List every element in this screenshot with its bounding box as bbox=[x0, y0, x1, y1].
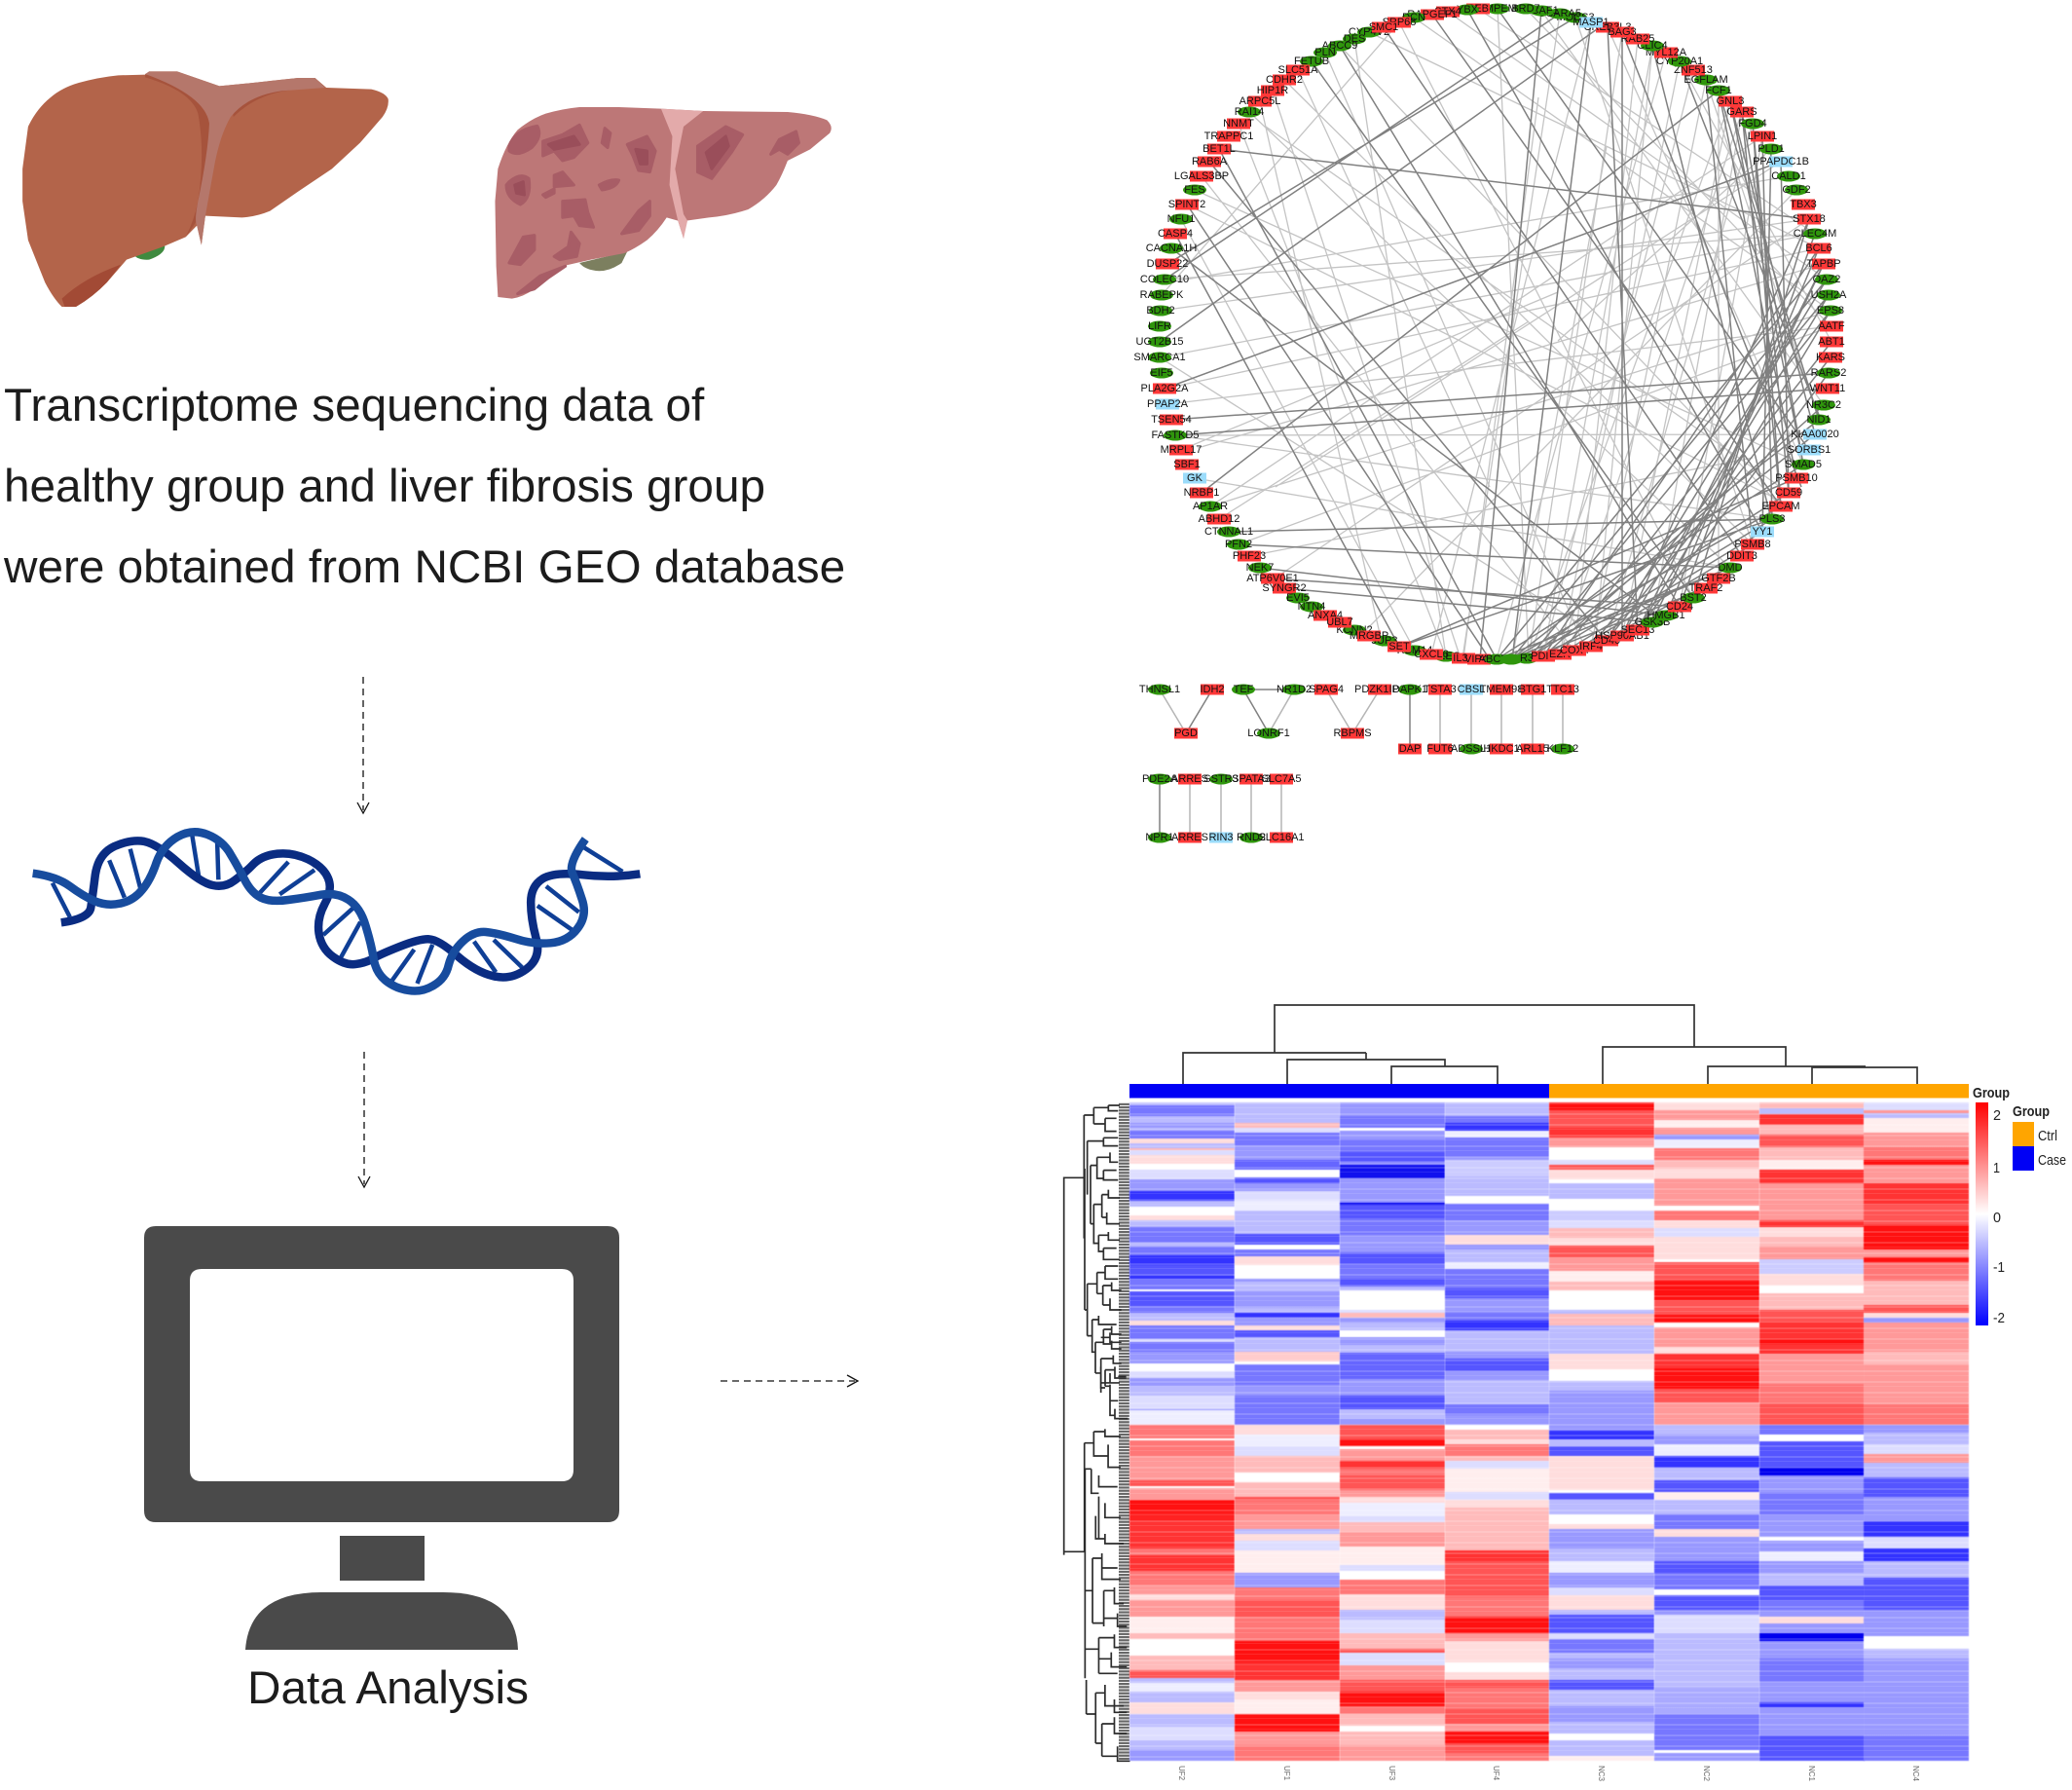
network nodes and gene labels: NTN4 bbox=[1298, 601, 1325, 613]
network nodes and gene labels: RAB25 bbox=[1621, 33, 1654, 45]
network nodes and gene labels: ABT1 bbox=[1818, 336, 1845, 348]
network nodes and gene labels: BST2 bbox=[1680, 592, 1707, 604]
network nodes and gene labels: SET bbox=[1388, 641, 1410, 653]
network nodes and gene labels: DMD bbox=[1718, 562, 1743, 574]
network nodes and gene labels: BRD7 bbox=[1511, 3, 1540, 15]
heatmap: sample labels: UF4 bbox=[1492, 1766, 1500, 1781]
network nodes and gene labels: CREB3L3 bbox=[1584, 21, 1631, 33]
network nodes and gene labels: SPINT2 bbox=[1168, 199, 1205, 210]
heatmap: sample labels bbox=[1177, 1766, 1920, 1782]
network nodes and gene labels bbox=[1133, 3, 1847, 665]
network nodes and gene labels: OAZ2 bbox=[1813, 274, 1840, 285]
network nodes and gene labels: MASP1 bbox=[1572, 17, 1610, 28]
network nodes and gene labels: NEK7 bbox=[1246, 562, 1274, 574]
network nodes and gene labels: FES bbox=[1184, 184, 1205, 196]
heatmap: colour scale legend: 2 bbox=[1993, 1107, 2001, 1124]
network nodes and gene labels: TSEN54 bbox=[1151, 414, 1192, 426]
cluster nodes and gene labels: TEF bbox=[1234, 684, 1254, 695]
network: small disconnected gene clusters bbox=[1139, 684, 1579, 843]
network nodes and gene labels: PPAP2A bbox=[1147, 398, 1189, 410]
network nodes and gene labels: COX4 bbox=[1560, 645, 1589, 656]
network: main circular gene interaction graph bbox=[1133, 3, 1847, 665]
network nodes and gene labels: RAI14 bbox=[1235, 106, 1264, 118]
network nodes and gene labels: ANXA4 bbox=[1308, 610, 1343, 621]
network nodes and gene labels: CD40 bbox=[1593, 635, 1620, 647]
network nodes and gene labels: TMPEM bbox=[1478, 3, 1517, 15]
heatmap column NC3 bbox=[1549, 1102, 1654, 1761]
cluster nodes and gene labels: ARL15 bbox=[1516, 743, 1549, 755]
network nodes and gene labels: NID1 bbox=[1806, 414, 1832, 426]
network nodes and gene labels: SBF1 bbox=[1173, 459, 1201, 470]
network nodes and gene labels: AP1AR bbox=[1193, 501, 1228, 512]
network nodes and gene labels: PLD1 bbox=[1758, 143, 1785, 155]
label: data analysis: Data Analysis bbox=[247, 1662, 529, 1714]
network nodes and gene labels: GNL3 bbox=[1717, 95, 1744, 107]
network nodes and gene labels: CYP4V2 bbox=[1349, 26, 1389, 38]
caption: transcriptome data source: healthy group and liver fibrosis group bbox=[4, 461, 765, 512]
network nodes and gene labels: RABEPK bbox=[1140, 289, 1184, 301]
network nodes and gene labels: PPAPDC1B bbox=[1753, 156, 1809, 168]
cluster nodes and gene labels: DAPK1 bbox=[1392, 684, 1427, 695]
network nodes and gene labels: FCF1 bbox=[1705, 85, 1732, 96]
cluster edges bbox=[1160, 690, 1563, 838]
network nodes and gene labels: EGFLAM bbox=[1684, 74, 1728, 86]
cluster nodes and gene labels: TSTA3 bbox=[1424, 684, 1457, 695]
heatmap: sample labels: NC1 bbox=[1807, 1766, 1816, 1782]
network nodes and gene labels: PDIA bbox=[1531, 651, 1556, 662]
cluster nodes and gene labels: CBSL bbox=[1458, 684, 1485, 695]
network nodes and gene labels: AATF bbox=[1818, 320, 1845, 332]
network nodes and gene labels: GARS bbox=[1726, 106, 1758, 118]
network nodes and gene labels: GSK3B bbox=[1635, 616, 1670, 628]
network nodes and gene labels: PLS3 bbox=[1759, 513, 1785, 525]
network nodes and gene labels: TRAF2 bbox=[1689, 582, 1722, 594]
cluster nodes and gene labels: PDE2A bbox=[1142, 773, 1178, 785]
heatmap: sample labels: UF1 bbox=[1282, 1766, 1291, 1781]
cluster nodes and gene labels: LONRF1 bbox=[1247, 727, 1290, 739]
heatmap: sample labels: UF2 bbox=[1177, 1766, 1186, 1781]
heatmap: group annotation bar bbox=[1129, 1084, 1969, 1099]
cluster nodes and gene labels: PGD bbox=[1174, 727, 1198, 739]
network nodes and gene labels: BCL6 bbox=[1805, 242, 1832, 254]
heatmap column UF1 bbox=[1235, 1102, 1340, 1761]
network nodes and gene labels: YY1 bbox=[1753, 526, 1772, 538]
cluster nodes and gene labels: IDH2 bbox=[1200, 684, 1225, 695]
cluster nodes and gene labels: KLF12 bbox=[1547, 743, 1578, 755]
cluster nodes and gene labels: RIN3 bbox=[1208, 832, 1234, 843]
network nodes and gene labels: BET1L bbox=[1202, 143, 1236, 155]
network nodes and gene labels: CTNNAL1 bbox=[1204, 526, 1253, 538]
network nodes and gene labels: GTF2B bbox=[1701, 573, 1736, 584]
network nodes and gene labels: DUSP22 bbox=[1147, 258, 1188, 270]
network nodes and gene labels: MOCS3 bbox=[1556, 12, 1595, 23]
network nodes and gene labels: BAG3 bbox=[1608, 26, 1637, 38]
cluster nodes and gene labels bbox=[1139, 684, 1579, 843]
network nodes and gene labels: SCARA5 bbox=[1538, 8, 1581, 19]
cluster nodes and gene labels: SPAG4 bbox=[1309, 684, 1344, 695]
network nodes and gene labels: PSMB10 bbox=[1775, 472, 1818, 484]
heatmap column UF2 bbox=[1129, 1102, 1235, 1761]
network nodes and gene labels: LGALS3BP bbox=[1174, 170, 1229, 182]
cluster nodes and gene labels: TTC13 bbox=[1546, 684, 1579, 695]
network nodes and gene labels: NRBP1 bbox=[1184, 487, 1219, 499]
network nodes and gene labels: BDH2 bbox=[1146, 305, 1175, 317]
heatmap: group legend: Case bbox=[2038, 1152, 2066, 1169]
network nodes and gene labels: ABCD4 bbox=[1479, 653, 1514, 665]
network nodes and gene labels: PHF23 bbox=[1233, 550, 1266, 562]
network nodes and gene labels: PEB bbox=[1467, 3, 1489, 15]
network nodes and gene labels: KCNN2 bbox=[1336, 624, 1373, 636]
cluster nodes and gene labels: RBPMS bbox=[1333, 727, 1372, 739]
cluster nodes and gene labels: NR1D2 bbox=[1276, 684, 1312, 695]
network nodes and gene labels: CYP20A1 bbox=[1656, 56, 1703, 67]
network nodes and gene labels: TBX3 bbox=[1790, 199, 1817, 210]
heatmap: sample labels: NC2 bbox=[1702, 1766, 1711, 1782]
network nodes and gene labels: IRF4 bbox=[1579, 641, 1603, 653]
network edges: weak interactions bbox=[1160, 9, 1832, 659]
network nodes and gene labels: RARS2 bbox=[1811, 367, 1846, 379]
network nodes and gene labels: CLEC4M bbox=[1794, 228, 1836, 240]
heatmap column NC1 bbox=[1759, 1102, 1865, 1761]
network nodes and gene labels: DCN bbox=[1402, 12, 1425, 23]
heatmap: group legend: Ctrl bbox=[2038, 1128, 2057, 1144]
arrow: liver to DNA bbox=[357, 677, 369, 813]
network nodes and gene labels: ATP6V0E1 bbox=[1246, 573, 1299, 584]
network nodes and gene labels: SMAD5 bbox=[1785, 459, 1822, 470]
network nodes and gene labels: CD24 bbox=[1666, 601, 1693, 613]
cluster nodes and gene labels: RND2 bbox=[1237, 832, 1266, 843]
cluster nodes and gene labels: FUT6 bbox=[1426, 743, 1454, 755]
network nodes and gene labels: CALD1 bbox=[1771, 170, 1806, 182]
network nodes and gene labels: EPCAM bbox=[1761, 501, 1800, 512]
cluster nodes and gene labels: HKDC1 bbox=[1483, 743, 1520, 755]
network nodes and gene labels: SRP68 bbox=[1383, 17, 1416, 28]
cluster nodes and gene labels: SSTR3 bbox=[1203, 773, 1239, 785]
network nodes and gene labels: LPIN1 bbox=[1748, 131, 1777, 142]
caption: transcriptome data source: were obtained from NCBI GEO database bbox=[4, 541, 845, 593]
network nodes and gene labels: NR3C2 bbox=[1806, 399, 1841, 411]
cluster nodes and gene labels: DAP bbox=[1399, 743, 1421, 755]
network nodes and gene labels: CASP4 bbox=[1158, 228, 1193, 240]
heatmap column UF4 bbox=[1445, 1102, 1549, 1761]
network nodes and gene labels: CLIC4 bbox=[1637, 40, 1668, 52]
network nodes and gene labels: ZNF513 bbox=[1674, 64, 1713, 76]
network nodes and gene labels: LIFR bbox=[1148, 320, 1171, 332]
cluster nodes and gene labels: ARRES bbox=[1171, 773, 1208, 785]
network nodes and gene labels: STX4 bbox=[1434, 6, 1462, 18]
heatmap: sample dendrogram bbox=[1183, 1005, 1917, 1084]
network nodes and gene labels: PSMB8 bbox=[1734, 539, 1771, 550]
network nodes and gene labels: COLEC10 bbox=[1140, 274, 1189, 285]
network nodes and gene labels: SMC1 bbox=[1369, 21, 1398, 33]
arrow: computer to results bbox=[721, 1375, 858, 1387]
network nodes and gene labels: SYNGR2 bbox=[1262, 582, 1307, 594]
heatmap: group legend bbox=[2013, 1103, 2066, 1171]
network nodes and gene labels: STX18 bbox=[1793, 213, 1826, 225]
heatmap column NC4 bbox=[1864, 1102, 1969, 1761]
network nodes and gene labels: EPS8 bbox=[1817, 305, 1844, 317]
heatmap column UF3 bbox=[1340, 1102, 1445, 1761]
heatmap: gene dendrogram bbox=[1064, 1102, 1130, 1761]
network nodes and gene labels: SCAF1 bbox=[1524, 5, 1559, 17]
network nodes and gene labels: CXCL6 bbox=[1414, 649, 1449, 660]
heatmap: colour scale legend bbox=[1973, 1085, 2010, 1326]
network nodes and gene labels: ABHD12 bbox=[1199, 513, 1240, 525]
network nodes and gene labels: VIP48 bbox=[1464, 653, 1494, 665]
network nodes and gene labels: MYL12A bbox=[1646, 47, 1687, 58]
heatmap: sample labels: NC3 bbox=[1597, 1766, 1606, 1782]
network nodes and gene labels: CD59 bbox=[1775, 487, 1802, 499]
heatmap: colour scale legend: 0 bbox=[1993, 1210, 2001, 1226]
network nodes and gene labels: TRAPPC1 bbox=[1204, 131, 1253, 142]
network nodes and gene labels: SORBS1 bbox=[1788, 444, 1831, 456]
network nodes and gene labels: WNT11 bbox=[1810, 383, 1845, 394]
icon: fibrotic liver bbox=[495, 107, 832, 299]
cluster nodes and gene labels: ADSSL1 bbox=[1451, 743, 1492, 755]
network nodes and gene labels: KARS bbox=[1816, 352, 1845, 363]
network nodes and gene labels: CACNA1H bbox=[1146, 242, 1197, 254]
network nodes and gene labels: CLEC bbox=[1431, 651, 1461, 662]
network nodes and gene labels: PLA2G2A bbox=[1141, 383, 1189, 394]
cluster nodes and gene labels: NPR1 bbox=[1145, 832, 1174, 843]
heatmap: colour scale legend: 1 bbox=[1993, 1160, 2000, 1176]
network nodes and gene labels: RAPGEF1 bbox=[1407, 9, 1458, 20]
network nodes and gene labels: SLC51A bbox=[1278, 64, 1318, 76]
caption: transcriptome data source: Transcriptome sequencing data of bbox=[4, 380, 704, 431]
network nodes and gene labels: SEC13 bbox=[1621, 624, 1654, 636]
network nodes and gene labels: RAB6A bbox=[1192, 156, 1228, 168]
icon: computer monitor bbox=[144, 1226, 619, 1650]
network nodes and gene labels: KIAA0020 bbox=[1791, 429, 1839, 440]
heatmap: sample labels: UF3 bbox=[1388, 1766, 1396, 1781]
network nodes and gene labels: CDHR2 bbox=[1266, 74, 1303, 86]
cluster nodes and gene labels: THNSL1 bbox=[1139, 684, 1180, 695]
network nodes and gene labels: R3 bbox=[1520, 653, 1534, 664]
cluster nodes and gene labels: SLC16A1 bbox=[1258, 832, 1305, 843]
heatmap fine stripe texture bbox=[1129, 1102, 1969, 1761]
network nodes and gene labels: IL32 bbox=[1453, 653, 1474, 664]
cluster nodes and gene labels: PDZK1IP1 bbox=[1354, 684, 1405, 695]
network nodes and gene labels: HSP90AB1 bbox=[1595, 630, 1649, 642]
network nodes and gene labels: EVI5 bbox=[1286, 592, 1310, 604]
heatmap: group legend: Group bbox=[2013, 1103, 2050, 1120]
cluster nodes and gene labels: ARRES bbox=[1171, 832, 1208, 843]
network nodes and gene labels: FGD4 bbox=[1738, 118, 1767, 130]
network nodes and gene labels: NFU1 bbox=[1167, 213, 1195, 225]
heatmap: colour scale legend: -1 bbox=[1993, 1259, 2005, 1276]
network edges: strong interactions bbox=[1160, 9, 1832, 659]
network nodes and gene labels: GDF2 bbox=[1782, 184, 1811, 196]
cluster nodes and gene labels: TMEM98 bbox=[1480, 684, 1523, 695]
network nodes and gene labels: FETUB bbox=[1294, 56, 1329, 67]
network nodes and gene labels: ARPC5L bbox=[1240, 95, 1280, 107]
network nodes and gene labels: DES bbox=[1344, 33, 1365, 45]
cluster nodes and gene labels: BTG1 bbox=[1519, 684, 1546, 695]
network nodes and gene labels: JUP3 bbox=[1372, 635, 1397, 647]
network nodes and gene labels: UGT2B15 bbox=[1136, 336, 1183, 348]
network nodes and gene labels: PFN2 bbox=[1225, 539, 1252, 550]
heatmap: expression matrix bbox=[1128, 1101, 1970, 1762]
arrow: DNA to computer bbox=[358, 1052, 370, 1187]
network nodes and gene labels: DDIT3 bbox=[1726, 550, 1758, 562]
heatmap: colour scale legend: -2 bbox=[1993, 1310, 2005, 1326]
network nodes and gene labels: YBX bbox=[1457, 4, 1479, 16]
network nodes and gene labels: ABCC9 bbox=[1322, 40, 1357, 52]
cluster nodes and gene labels: SLC7A5 bbox=[1262, 773, 1301, 785]
cluster nodes and gene labels: SPATA3 bbox=[1232, 773, 1271, 785]
network nodes and gene labels: UBL7 bbox=[1326, 616, 1353, 628]
network nodes and gene labels: USH2A bbox=[1811, 289, 1847, 301]
network nodes and gene labels: HIP1R bbox=[1257, 85, 1288, 96]
network nodes and gene labels: EZR bbox=[1549, 649, 1571, 660]
heatmap: sample labels: NC4 bbox=[1911, 1766, 1920, 1782]
network nodes and gene labels: HMGB1 bbox=[1646, 610, 1685, 621]
network nodes and gene labels: PLN bbox=[1314, 47, 1336, 58]
network nodes and gene labels: NNMT bbox=[1223, 118, 1254, 130]
network nodes and gene labels: SMARCA1 bbox=[1133, 352, 1186, 363]
network nodes and gene labels: EIF5 bbox=[1150, 367, 1173, 379]
network nodes and gene labels: MRPL17 bbox=[1161, 444, 1202, 456]
heatmap column NC2 bbox=[1654, 1102, 1759, 1761]
network nodes and gene labels: TAPBP bbox=[1806, 258, 1841, 270]
network nodes and gene labels: RBM14 bbox=[1397, 645, 1432, 656]
icon: DNA double helix bbox=[33, 832, 640, 991]
icon: healthy liver bbox=[22, 71, 388, 307]
network nodes and gene labels: GK bbox=[1187, 472, 1203, 484]
network nodes and gene labels: FASTKD5 bbox=[1152, 429, 1199, 441]
network nodes and gene labels: MRGBP bbox=[1350, 630, 1388, 642]
caption: transcriptome data source bbox=[4, 380, 845, 593]
heatmap: colour scale legend: Group bbox=[1973, 1085, 2010, 1101]
